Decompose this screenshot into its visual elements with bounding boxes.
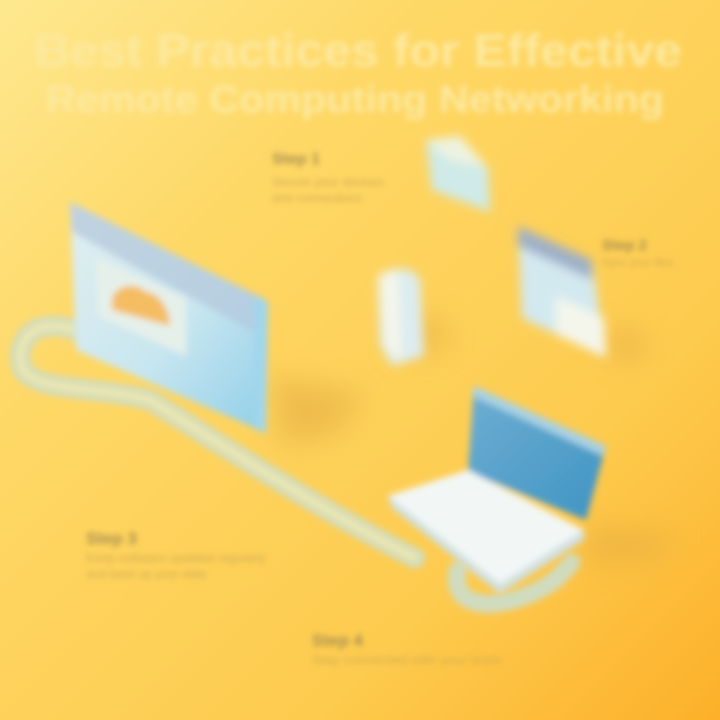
laptop <box>388 386 606 594</box>
label: bottom left: Step 3 <box>86 529 137 548</box>
monitor window <box>96 258 186 356</box>
label: bottom left: Keep software updated regularly <box>86 551 266 565</box>
label: bottom centre: Step 4 <box>312 631 364 650</box>
title <box>34 25 682 121</box>
label: bottom centre: Stay connected with your team <box>312 653 502 667</box>
top floating card <box>426 136 490 212</box>
shadows <box>270 317 680 565</box>
laptop screen <box>468 386 606 520</box>
label: right: Step 2 <box>602 237 647 254</box>
label: bottom left <box>86 529 266 581</box>
phone <box>378 269 424 366</box>
label: right: Sync your files <box>602 257 674 269</box>
label: top centre: Secure your devices <box>272 175 384 189</box>
cable <box>20 326 572 604</box>
label: bottom left: and back up your data <box>86 567 206 581</box>
label: top centre <box>272 151 384 205</box>
title: Remote Computing Networking <box>46 79 664 121</box>
label: bottom centre <box>312 631 502 667</box>
title: Best Practices for Effective <box>34 25 682 76</box>
label: right <box>602 237 674 269</box>
label: top centre: and connections <box>272 191 362 205</box>
label: top centre: Step 1 <box>272 151 320 168</box>
right tablet <box>518 226 606 358</box>
monitor <box>70 202 268 434</box>
laptop base <box>388 470 584 584</box>
